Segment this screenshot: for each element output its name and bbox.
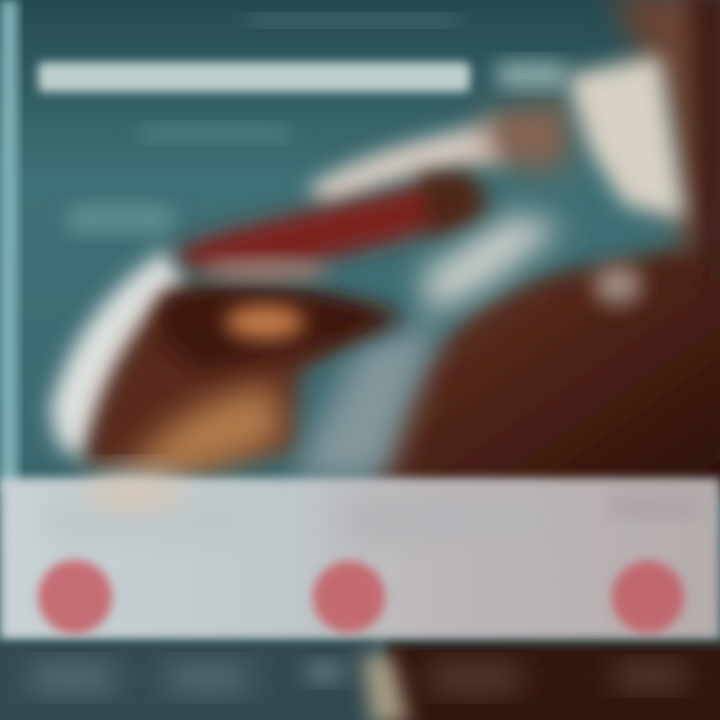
cloth: grey drape [290, 320, 440, 480]
body: dark torso [370, 235, 720, 490]
column 1 text [45, 500, 250, 540]
highlight: small white spot [594, 265, 642, 305]
side label [68, 205, 173, 233]
icon: circle 2 [313, 561, 385, 633]
title: main heading bar [38, 62, 470, 92]
column 2 text [340, 500, 550, 540]
subtitle [140, 126, 290, 140]
footer: text block 4 [430, 665, 520, 691]
wound: brown upper [420, 170, 490, 235]
wound: pale highlight [200, 260, 330, 280]
title: small line above [245, 16, 460, 25]
wound: dark crust [160, 285, 405, 370]
wound: tan skin [125, 385, 285, 475]
wound: orange centre [225, 305, 305, 339]
cloth: shoulder white wrap [565, 55, 685, 220]
footer: beige cloth sliver [362, 655, 410, 720]
warm glow at top of band [85, 472, 185, 508]
cloth: left white drape [50, 250, 185, 460]
icon: circle 1 [38, 560, 112, 634]
title: heading continuation [497, 62, 567, 88]
photo: arm and wound illustration [50, 0, 720, 490]
footer: text block 1 [30, 665, 115, 691]
footer band [0, 644, 720, 720]
left accent strip [0, 0, 18, 490]
wound: red band [175, 180, 470, 270]
footer: text block 2 [165, 665, 250, 691]
column 3 text [610, 495, 700, 517]
body: upper right shoulder [610, 0, 720, 250]
title [38, 16, 567, 233]
cloth: upper white bandage [305, 120, 510, 205]
icon: circle 3 [612, 561, 684, 633]
cloth: middle white patch [420, 215, 565, 315]
footer: text block 3 [305, 662, 345, 682]
cloth: brown patch upper [480, 100, 570, 170]
footer: text block 5 [615, 665, 685, 687]
info band [0, 472, 720, 640]
wound: brown arm [85, 290, 390, 470]
